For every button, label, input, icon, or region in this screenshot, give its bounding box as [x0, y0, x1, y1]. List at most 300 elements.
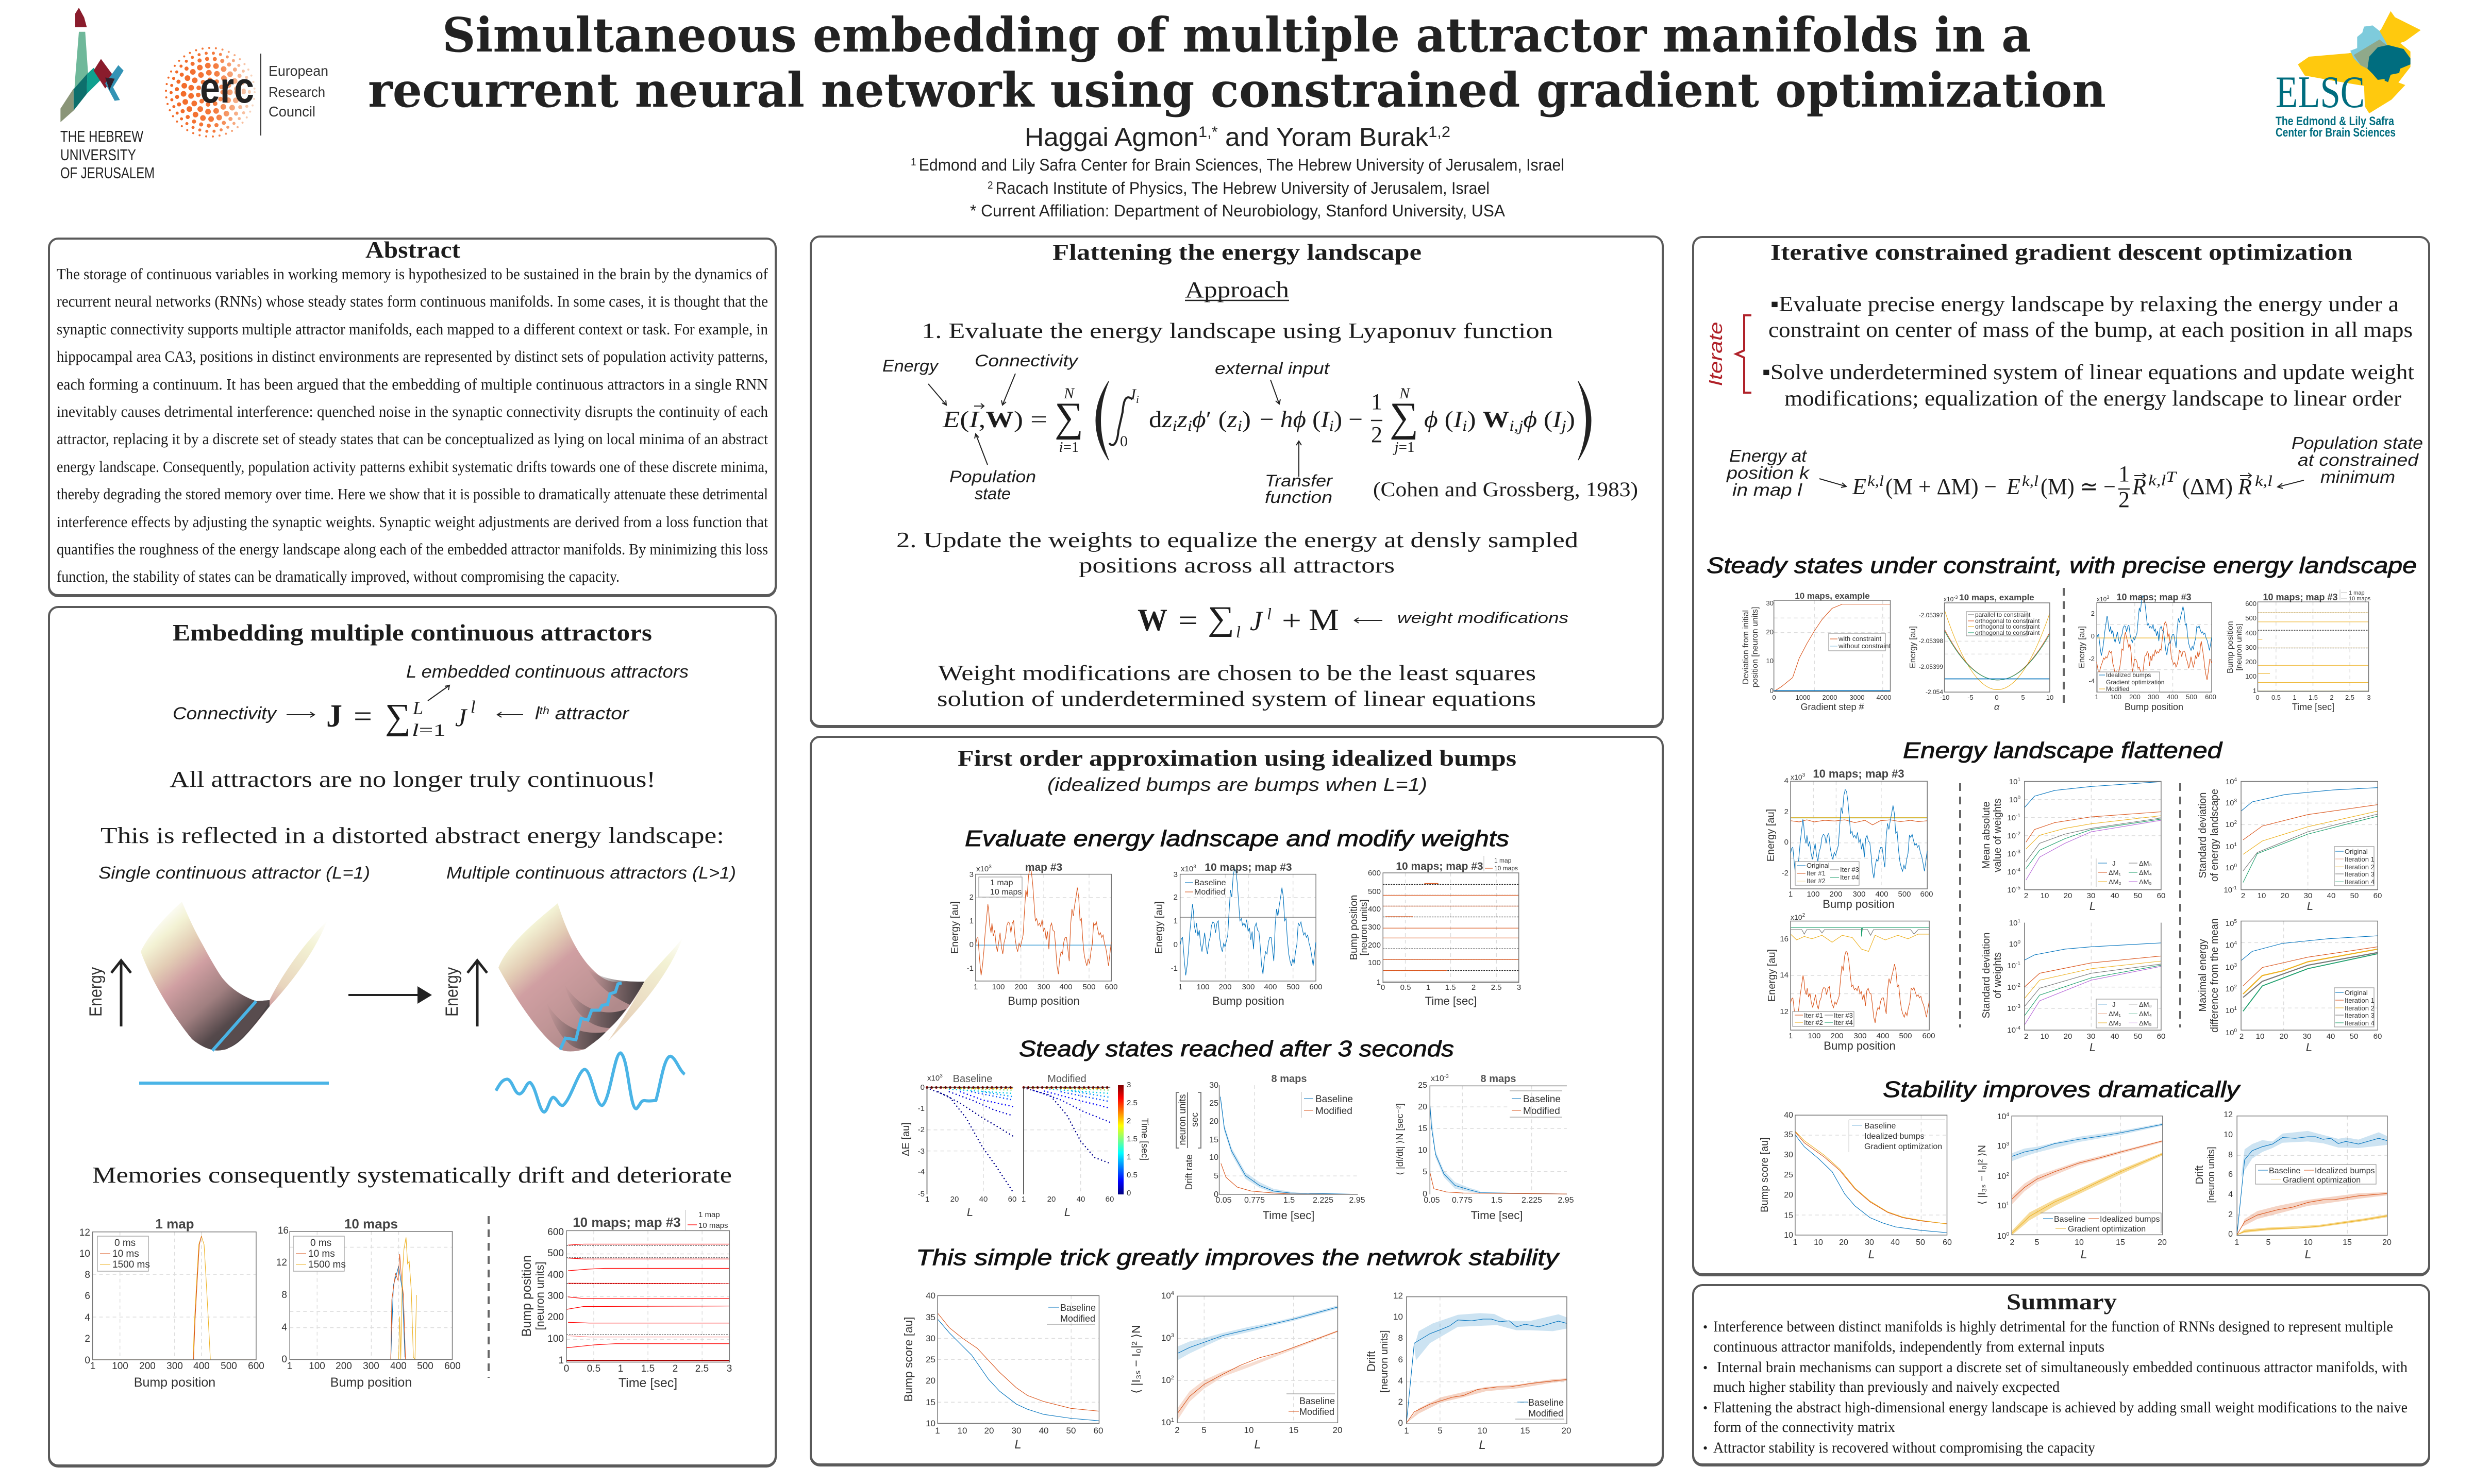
weights formula: +: [1282, 605, 1301, 637]
method bullets: modifications; equalization of the energy landscape to linear order: [1784, 387, 2401, 411]
chart: energy iterations bottom: 16: [1780, 935, 1788, 943]
linear order formula: k,l: [2255, 473, 2272, 490]
chart: bump score comparison: 30: [1784, 1151, 1793, 1159]
chart: 10 maps: 200: [336, 1361, 352, 1372]
chart: bump position: 100: [1368, 958, 1381, 967]
legend: Iter #3: [1834, 1011, 1853, 1019]
chart: drift comparison: 0: [2228, 1230, 2233, 1239]
step 2: positions across all attractors: [1079, 554, 1395, 578]
weights formula: weight modifications: [1397, 610, 1568, 627]
authors and affiliations: Edmond and Lily Safra Center for Brain Sciences, The Hebrew University of Jerusalem, Israel: [919, 156, 1564, 174]
chart: baseline energy differences: 60: [1008, 1195, 1016, 1204]
chart: 10 maps energy: Bump position: [1212, 994, 1284, 1007]
abstract text: attractor, replacing it by a discrete set of steady states that can be conceptualized as lying on local minima of an abstract: [57, 430, 768, 448]
colorbar: [1118, 1081, 1150, 1198]
chart: 1 map: 8: [85, 1270, 90, 1280]
authors and affiliations: Haggai Agmon: [1025, 123, 1194, 151]
chart: energy parabola: 0: [1995, 694, 1999, 701]
chart: map #3 energy: 600: [1105, 983, 1118, 991]
chart: map #3 energy: 3: [969, 870, 974, 879]
chart: precise energy: Bump position: [2125, 702, 2183, 712]
legend: [2096, 858, 2152, 887]
abstract text: interference effects by adjusting the synaptic weights. Synaptic weight adjustments are derived from a loss function that: [57, 513, 768, 531]
chart: energy iterations top: 300: [1852, 890, 1866, 899]
chart: displacement comparison: [1977, 1112, 2167, 1261]
chart: 1 map: 12: [79, 1227, 90, 1238]
chart: baseline energy differences: 1: [925, 1195, 929, 1204]
chart: bump position 10 maps: 1: [618, 1363, 623, 1374]
flattening heading: Flattening the energy landscape: [1052, 240, 1422, 265]
chart: energy parabola: -3: [1953, 595, 1958, 600]
panel: abstract: [49, 237, 776, 596]
chart: bump score: [902, 1291, 1103, 1452]
chart: std of energy landscape: 2: [2234, 820, 2237, 825]
chart: std of weights: 10: [2009, 919, 2017, 927]
chart: deviation vs gradient step: Deviation from initial: [1742, 610, 1750, 684]
connectivity formula: l: [471, 698, 475, 717]
chart: baseline energy differences: -1: [918, 1104, 925, 1113]
chart: displacement comparison: 10: [1997, 1112, 2006, 1121]
Lyapunov formula: i,j: [1509, 417, 1523, 434]
legend: ΔM₅: [2139, 878, 2152, 886]
energy surface: single attractor: [141, 902, 327, 1051]
chart: energy iterations bottom: 600: [1922, 1032, 1935, 1040]
logo: Hebrew University: OF JERUSALEM: [60, 164, 155, 182]
chart: 1 map: 4: [85, 1312, 90, 1323]
summary bullets: Attractor stability is recovered without compromising the capacity: [1713, 1439, 2095, 1456]
legend: [2041, 1213, 2161, 1234]
chart: energy iterations top: Bump position: [1823, 898, 1895, 910]
Lyapunov formula: ϕ (I: [1424, 406, 1461, 432]
chart: mean absolute weights: -3: [2016, 849, 2020, 855]
legend: Gradient optimization: [1864, 1142, 1942, 1151]
chart: bump position constrained: 1: [2253, 687, 2256, 695]
chart: map #3 energy: Bump position: [1008, 994, 1080, 1007]
linear order formula: T: [2166, 468, 2178, 485]
chart: mean absolute weights: 10: [2041, 891, 2049, 900]
chart: precise energy: 3: [2107, 595, 2109, 600]
chart: precise energy: 10 maps; map #3: [2116, 592, 2192, 602]
legend: J: [2112, 1001, 2115, 1008]
chart: state displacement: 5: [1201, 1425, 1207, 1435]
chart: 1 map: 300: [166, 1361, 183, 1372]
connectivity formula: J: [455, 703, 468, 732]
chart: 10 maps: 16: [278, 1225, 289, 1236]
chart: bump position constrained: Time [sec]: [2292, 702, 2334, 712]
summary bullets: [1703, 1318, 2408, 1456]
section: energy landscape flattened: Energy landscape flattened: [1903, 738, 2223, 763]
chart: baseline energy differences: 40: [979, 1195, 988, 1204]
formula annotations: [882, 351, 1333, 507]
chart: energy iterations top: 4: [1784, 777, 1788, 785]
chart: energy iterations top: Energy [au]: [1765, 809, 1777, 862]
chart: std of energy landscape: 20: [2281, 891, 2289, 900]
chart: maximal energy difference: 10: [2226, 919, 2234, 928]
legend: Iteration 4: [2345, 1019, 2375, 1027]
chart: bump score comparison: 35: [1784, 1131, 1793, 1139]
chart: state change rate: x10: [1431, 1074, 1444, 1083]
icon: energy arrow right: [442, 960, 487, 1026]
chart: std of weights: [1981, 918, 2165, 1054]
legend: Gradient optimization: [2106, 679, 2164, 686]
step 2: [896, 529, 1578, 578]
legend: ΔM₃: [2139, 859, 2152, 867]
chart: state displacement: 10: [1161, 1375, 1171, 1385]
chart: baseline energy differences: 0: [921, 1083, 925, 1092]
chart: 10 maps: 0: [281, 1354, 287, 1365]
chart: drift rate: 0.775: [1244, 1196, 1265, 1205]
chart: energy parabola: 5: [2021, 694, 2025, 701]
chart: energy parabola: 10 maps, example: [1959, 593, 2034, 602]
chart: map #3 energy: 1: [974, 983, 978, 991]
chart: drift comparison: 1: [2235, 1238, 2239, 1247]
flat energy line: [139, 1082, 329, 1085]
abstract text: inevitably causes detrimental interference: quenched noise in the synaptic connectivity disrupts the continuity of each: [57, 402, 768, 420]
linear order formula: (M + ΔM) −: [1885, 474, 1997, 499]
authors and affiliations: * Current Affiliation: Department of Neurobiology, Stanford University, USA: [970, 201, 1506, 220]
legend: Modified: [1523, 1106, 1560, 1117]
abstract text: function, the stability of states can be dramatically improved, without compromising the capacity.: [57, 567, 620, 585]
chart: displacement comparison: 10: [1997, 1202, 2006, 1210]
chart: std of weights: 2: [2024, 1032, 2028, 1041]
chart: bump position constrained: 10 maps; map #3: [2263, 592, 2338, 602]
chart: std of weights: -4: [2016, 1025, 2020, 1031]
chart: maximal energy difference: 2: [2234, 984, 2237, 990]
chart: drift rate: 0.05: [1215, 1196, 1232, 1205]
chart: energy iterations top: 10 maps; map #3: [1813, 767, 1904, 780]
chart: 1 map: 0: [85, 1355, 90, 1366]
connectivity formula: l=1: [412, 721, 446, 740]
chart: precise energy: 2: [2091, 610, 2095, 617]
chart: energy iterations bottom: 14: [1780, 971, 1788, 980]
chart: bump position constrained: [2226, 589, 2371, 712]
chart: drift comparison: 4: [2228, 1190, 2233, 1199]
chart: mean absolute weights: 10: [2007, 850, 2016, 858]
chart: bump score: Bump score [au]: [902, 1317, 915, 1402]
chart: mean absolute weights: -5: [2016, 885, 2020, 891]
chart: bump position 10 maps: 0.5: [587, 1363, 600, 1374]
formula annotations: Energy at: [1729, 446, 1808, 465]
chart: bump position 10 maps: 3: [727, 1363, 732, 1374]
chart: displacement comparison: 10: [2075, 1238, 2084, 1247]
legend: Idealized bumps: [2315, 1167, 2375, 1175]
chart: drift rate: 8 maps: [1272, 1073, 1307, 1085]
chart: drift comparison: 6: [2228, 1170, 2233, 1179]
chart: drift: 10: [1393, 1312, 1403, 1322]
chart: mean absolute weights: 10: [2009, 778, 2017, 786]
chart: std of weights: 30: [2087, 1032, 2095, 1041]
chart: bump position 10 maps: 10 maps; map #3: [573, 1215, 681, 1230]
chart: precise energy: 200: [2129, 693, 2141, 701]
chart: energy iterations top: 200: [1829, 890, 1843, 899]
chart: 10 maps energy: 400: [1264, 983, 1277, 991]
chart: map #3 energy: 2: [969, 893, 974, 902]
abstract text: energy landscape. Consequently, population activity patterns exhibit systematic drifts towards one of these discrete minima,: [57, 458, 768, 476]
colorbar: 0: [1127, 1189, 1131, 1198]
chart: displacement comparison: 2: [2006, 1172, 2009, 1177]
legend: orthogonal to constraint: [1975, 617, 2040, 625]
legend: Iter #4: [1840, 873, 1859, 881]
legend: 10 maps: [990, 888, 1022, 897]
logo: European Research Council: Council: [269, 104, 315, 120]
legend: [2098, 671, 2164, 693]
formula annotations: position k: [1726, 463, 1810, 482]
chart: mean absolute weights: -4: [2016, 867, 2020, 873]
chart: displacement comparison: 0: [2006, 1232, 2009, 1237]
chart: drift: 15: [1520, 1426, 1530, 1436]
chart: bump position 10 maps: 0: [564, 1363, 569, 1374]
colorbar: Time [sec]: [1140, 1118, 1150, 1160]
chart: bump position 10 maps: 1: [558, 1355, 564, 1366]
authors and affiliations: and Yoram Burak: [1218, 123, 1429, 151]
chart: bump position: Bump position: [1348, 895, 1360, 960]
abstract text: hippocampal area CA3, positions in distinct environments are represented by distinct sets of population activity patterns,: [57, 347, 768, 365]
abstract text: quantifies the roughness of the energy landscape along each of the embedded attractor manifolds. By minimizing this loss: [57, 540, 768, 558]
chart: modified energy differences: 1: [1022, 1195, 1026, 1204]
legend: [1047, 1303, 1096, 1324]
chart: maximal energy difference: Maximal energy: [2197, 939, 2209, 1012]
chart: 10 maps energy: 10 maps; map #3: [1205, 862, 1292, 873]
chart: deviation vs gradient step: 0: [1770, 687, 1774, 695]
legend: Modified: [1194, 888, 1225, 897]
logo: ELSC: The Edmond & Lily Safra: [2276, 114, 2395, 128]
chart: baseline energy differences: [900, 1073, 1016, 1219]
legend: parallel to constraint: [1975, 611, 2031, 618]
chart: precise energy: 100: [2110, 693, 2121, 701]
chart: bump position constrained: 200: [2245, 658, 2256, 666]
Lyapunov formula: W: [1483, 406, 1509, 432]
section: stability trick: This simple trick greatly improves the netwrok stability: [916, 1245, 1561, 1270]
chart: maximal energy difference: 10: [2256, 1032, 2264, 1041]
chart: precise energy: [2078, 592, 2216, 712]
chart: precise energy: 500: [2186, 693, 2197, 701]
panel: flattening the energy landscape: [811, 237, 1663, 727]
chart: std of weights: -2: [2016, 983, 2020, 988]
chart: baseline energy differences: -2: [918, 1125, 925, 1134]
chart: mean absolute weights: 50: [2134, 891, 2142, 900]
chart: drift: 8: [1398, 1333, 1403, 1343]
chart: state displacement: L: [1254, 1438, 1261, 1452]
logo: ELSC: [2276, 11, 2421, 140]
summary bullets: •: [1703, 1320, 1708, 1335]
Lyapunov formula: ): [1467, 406, 1483, 432]
chart: std of energy landscape: of energy landscape: [2209, 789, 2220, 882]
chart: std of weights: 10: [2041, 1032, 2049, 1041]
chart: displacement comparison: 1: [2006, 1201, 2009, 1207]
divider: [488, 1216, 490, 1378]
abstract text: [57, 265, 768, 585]
chart: bump position 10 maps: 200: [547, 1312, 564, 1323]
legend: ΔM₄: [2139, 1010, 2152, 1018]
legend: [2334, 847, 2375, 886]
chart: precise energy: 600: [2205, 693, 2216, 701]
legend: Iteration 4: [2345, 878, 2375, 886]
chart: maximal energy difference: 20: [2280, 1032, 2288, 1041]
chart: energy iterations top: 600: [1920, 890, 1933, 899]
chart: state displacement: 3: [1171, 1333, 1174, 1339]
chart: energy iterations bottom: 2: [1802, 913, 1806, 918]
chart: std of energy landscape: -1: [2232, 885, 2237, 891]
chart: bump score comparison: 10: [1784, 1231, 1793, 1240]
chart: displacement comparison: 15: [2116, 1238, 2125, 1247]
chart: 10 maps: 12: [276, 1257, 287, 1268]
summary bullets: •: [1703, 1441, 1708, 1456]
chart: state change rate: 2.225: [1522, 1196, 1542, 1205]
chart: energy iterations top: -2: [1782, 869, 1788, 878]
chart: state change rate: 20: [1418, 1103, 1427, 1111]
Lyapunov formula: i: [1136, 393, 1139, 406]
logo: Hebrew University: [60, 8, 155, 182]
chart: bump position 10 maps: 2: [673, 1363, 678, 1374]
panel: first order approximation: [811, 737, 1663, 1465]
chart: state change rate: 1.5: [1491, 1196, 1502, 1205]
chart: bump position: 2: [1472, 983, 1476, 992]
chart: precise energy: Energy [au]: [2078, 626, 2086, 668]
chart: deviation vs gradient step: 10 maps, example: [1795, 591, 1870, 601]
chart: std of energy landscape: 10: [2226, 842, 2234, 851]
linear order formula: (M) ≃ −: [2041, 474, 2116, 499]
chart: std of energy landscape: [2197, 777, 2382, 913]
chart: precise energy: -2: [2088, 655, 2095, 663]
chart: map #3 energy: 300: [1037, 983, 1050, 991]
least squares note: [937, 662, 1536, 711]
chart: 10 maps energy: -1: [1171, 964, 1178, 973]
formula annotations: Connectivity: [975, 351, 1079, 370]
legend: with constraint: [1838, 635, 1881, 643]
chart: maximal energy difference: 50: [2350, 1032, 2358, 1041]
chart: bump score: 60: [1094, 1426, 1103, 1436]
chart: mean absolute weights: L: [2089, 900, 2096, 913]
chart: energy iterations top: 1: [1788, 890, 1793, 899]
chart: energy iterations bottom: Energy [au]: [1766, 949, 1778, 1002]
chart: drift: 1: [1404, 1426, 1409, 1436]
chart: drift rate: 25: [1209, 1099, 1218, 1108]
logo: European Research Council: Research: [269, 84, 325, 100]
summary bullets: •: [1703, 1360, 1708, 1375]
chart: mean absolute weights: [1981, 777, 2165, 913]
chart: 1 map: 6: [85, 1291, 90, 1302]
chart: std of energy landscape: 10: [2226, 820, 2234, 829]
chart: std of energy landscape: 10: [2258, 891, 2266, 900]
title: [368, 7, 2106, 118]
chart: deviation vs gradient step: 0: [1772, 694, 1776, 701]
chart: drift: 20: [1562, 1426, 1571, 1436]
chart: 10 maps: Bump position: [330, 1375, 412, 1390]
chart: map #3 energy: x10: [976, 865, 989, 873]
chart: state displacement: 10: [1161, 1291, 1171, 1301]
chart: map #3 energy: 400: [1059, 983, 1073, 991]
chart: 10 maps: 500: [417, 1361, 433, 1372]
chart: bump position 10 maps: [520, 1210, 732, 1390]
legend: Baseline: [1523, 1094, 1561, 1105]
chart: drift: 4: [1398, 1376, 1403, 1386]
chart: maximal energy difference: 10: [2226, 1006, 2234, 1015]
chart: drift: 2: [1398, 1397, 1403, 1407]
chart: state displacement: 4: [1171, 1290, 1174, 1296]
chart: energy iterations top: 400: [1875, 890, 1888, 899]
authors and affiliations: 1,2: [1428, 124, 1450, 141]
chart: maximal energy difference: 10: [2226, 941, 2234, 950]
chart: 1 map: 600: [248, 1361, 264, 1372]
logo: Hebrew University: THE HEBREW: [60, 127, 144, 145]
chart: bump position: 500: [1368, 887, 1381, 896]
legend: 0 ms: [114, 1238, 136, 1249]
colorbar: 1.5: [1127, 1135, 1138, 1143]
chart: std of energy landscape: 10: [2224, 886, 2232, 895]
chart: bump score: 10: [958, 1426, 967, 1436]
chart: energy iterations top: 2: [1784, 807, 1788, 816]
chart: map #3 energy: map #3: [1025, 862, 1062, 873]
legend: 10 ms: [112, 1249, 139, 1259]
chart: 10 maps energy: 600: [1309, 983, 1323, 991]
chart: displacement comparison: 2: [2010, 1238, 2015, 1247]
label: multiple attractors: Multiple continuous attractors (L>1): [446, 863, 736, 882]
chart: bump position 10 maps: [neuron units]: [533, 1261, 546, 1330]
chart: bump score comparison: 10: [1814, 1238, 1823, 1247]
chart: drift comparison: 2: [2228, 1210, 2233, 1219]
chart: displacement comparison: 5: [2035, 1238, 2040, 1247]
chart: std of energy landscape: 60: [2373, 891, 2382, 900]
chart: bump score comparison: 15: [1784, 1211, 1793, 1220]
chart: bump score: 25: [926, 1355, 935, 1364]
chart: drift comparison: [neuron units]: [2206, 1146, 2216, 1203]
chart: 10 maps energy: 3: [1193, 864, 1196, 870]
chart: mean absolute weights: 20: [2064, 891, 2072, 900]
logo: Hebrew University: UNIVERSITY: [60, 146, 136, 164]
chart: displacement comparison: 10: [1997, 1142, 2006, 1151]
Lyapunov formula: [942, 381, 1591, 460]
chart: drift rate: neuron units: [1177, 1094, 1188, 1145]
chart: state change rate: 0.775: [1452, 1196, 1473, 1205]
chart: bump position 10 maps: 300: [547, 1291, 564, 1302]
chart: bump score: 10: [926, 1419, 935, 1428]
chart: 10 maps energy: 500: [1286, 983, 1300, 991]
chart: 1 map: 400: [193, 1361, 210, 1372]
legend: [1966, 611, 2040, 636]
legend: 1 map: [2349, 590, 2365, 596]
chart: bump position 10 maps: 600: [547, 1227, 564, 1238]
Lyapunov formula: ) −: [1334, 406, 1363, 432]
chart: energy parabola: Energy [au]: [1909, 626, 1917, 668]
chart: std of weights: 20: [2064, 1032, 2072, 1041]
chart: displacement comparison: 4: [2006, 1112, 2009, 1118]
subheading: (idealized bumps are bumps when L=1): [1047, 774, 1427, 795]
chart: modified energy differences: Modified: [1047, 1073, 1086, 1085]
chart: mean absolute weights: 10: [2007, 832, 2016, 840]
divider: [2179, 783, 2181, 1027]
chart: bump score: 40: [1039, 1426, 1048, 1436]
summary bullets: Interference between distinct manifolds is highly detrimental for the function of RNNs designed to represent multiple: [1713, 1318, 2393, 1335]
chart: 1 map: 500: [221, 1361, 237, 1372]
authors and affiliations: 2: [988, 180, 996, 191]
Lyapunov formula: dz: [1149, 406, 1172, 432]
chart: 10 maps: 600: [444, 1361, 461, 1372]
Lyapunov formula: i: [1173, 417, 1177, 434]
chart: bump position: 400: [1368, 905, 1381, 914]
chart: drift rate: 0: [1214, 1190, 1218, 1199]
chart: maximal energy difference: 4: [2234, 940, 2237, 946]
chart: deviation vs gradient step: 4000: [1877, 694, 1891, 701]
chart: drift comparison: 20: [2382, 1238, 2392, 1247]
legend: 1500 ms: [112, 1259, 150, 1270]
abstract heading: Abstract: [365, 237, 461, 263]
statement: This is reflected in a distorted abstract energy landscape:: [101, 823, 724, 848]
section: steady states under constraint: Steady states under constraint, with precise energy landscape: [1707, 553, 2417, 578]
chart: energy iterations bottom: 200: [1830, 1032, 1844, 1040]
chart: 10 maps energy: Energy [au]: [1154, 901, 1165, 954]
legend: Modified: [1315, 1106, 1352, 1117]
chart: 10 maps: 300: [363, 1361, 379, 1372]
